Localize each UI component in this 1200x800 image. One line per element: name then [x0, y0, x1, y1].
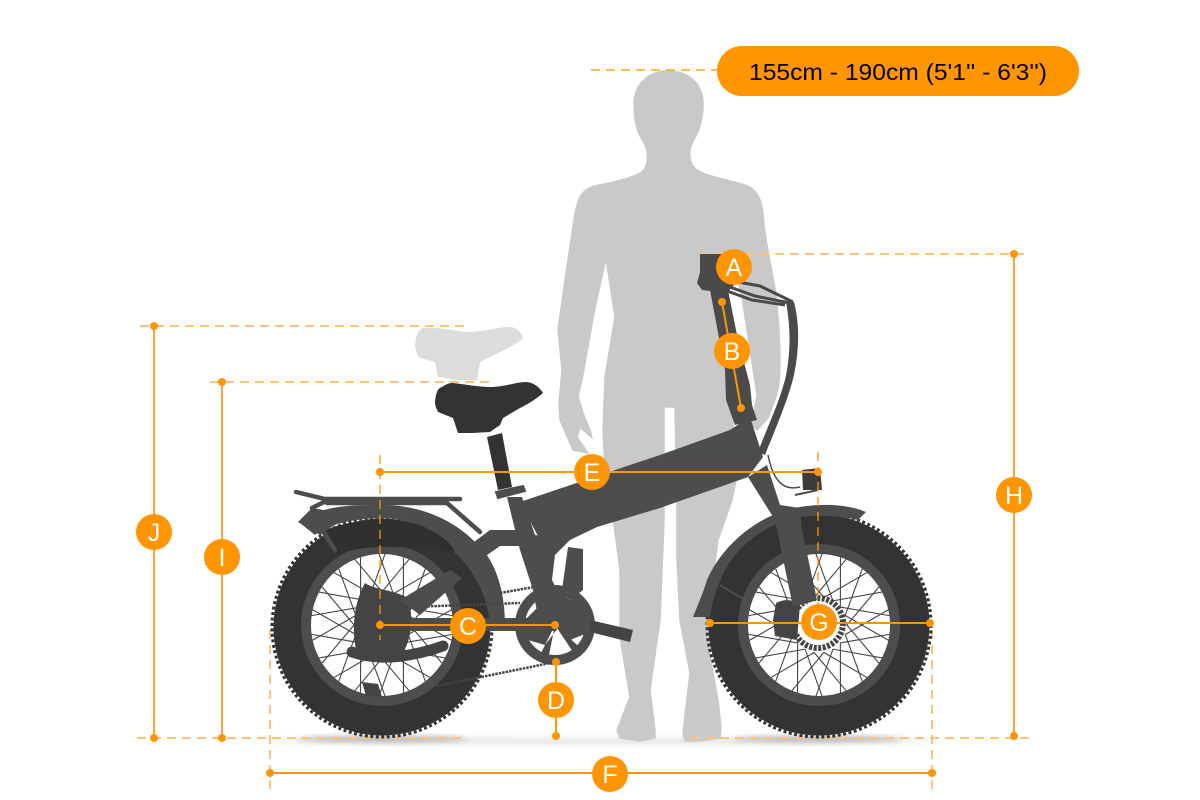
human silhouette: [558, 71, 780, 741]
rider height callout: [717, 46, 1079, 96]
dimension A: [716, 249, 752, 285]
dimension G: G: [809, 609, 829, 637]
dimension E: E: [584, 459, 600, 487]
dimension D: D: [547, 687, 565, 715]
ground shadow: [260, 736, 940, 744]
dimension J: [136, 322, 172, 742]
handlebar and stem: [697, 254, 798, 455]
dimension E: [376, 454, 822, 490]
front wheel: [707, 513, 931, 737]
dimension J: J: [148, 519, 160, 547]
rear fender and rack: [296, 492, 505, 625]
dashed guide lines: [137, 254, 1030, 795]
dimension H: [996, 250, 1032, 740]
dimension F: [266, 756, 936, 792]
dimension C: [376, 608, 559, 644]
dimension G: [706, 604, 934, 640]
dimension I: [204, 378, 240, 742]
rider height callout: 155cm - 190cm (5'1'' - 6'3''): [749, 59, 1047, 85]
saddle: [435, 382, 543, 433]
dimension B: B: [724, 338, 740, 366]
drivetrain and chainring: [410, 586, 633, 686]
dimension A: A: [726, 254, 743, 282]
dimension I: I: [219, 544, 225, 572]
dimension D: [538, 658, 574, 740]
front fender: [693, 505, 866, 617]
bike frame: [400, 417, 817, 631]
headlight: [768, 455, 822, 495]
dashed axle guides: [380, 70, 818, 640]
rear wheel: [272, 517, 492, 737]
dimension C: C: [459, 613, 477, 641]
dimension B: [714, 298, 750, 412]
dimension H: H: [1005, 482, 1023, 510]
dimension F: F: [602, 761, 618, 789]
ghost raised saddle: [415, 327, 523, 380]
seat post: [487, 433, 512, 490]
